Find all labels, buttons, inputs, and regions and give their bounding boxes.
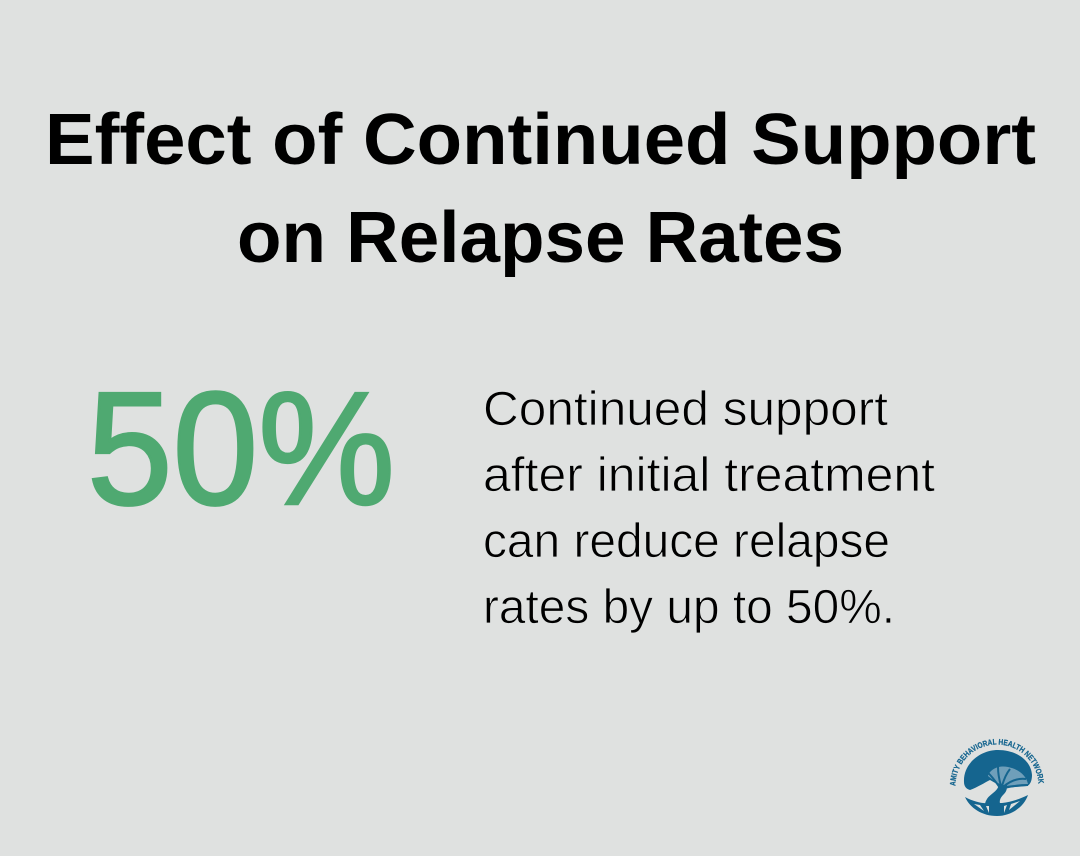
roots arc [965,795,1028,816]
description text: rates by up to 50%. [483,581,895,634]
title [45,100,1036,278]
description text: can reduce relapse [483,515,890,568]
title: Effect of Continued Support [45,100,1036,180]
description text [483,383,935,634]
title: on Relapse Rates [237,198,844,278]
statistic: 50%: 50% [87,359,395,539]
canopy highlights [988,766,1028,786]
description text: after initial treatment [483,449,935,502]
icon: Amity Behavioral Health Network logo [950,738,1044,816]
tree branches [987,767,1028,788]
icon: Amity Behavioral Health Network logo: AMITY BEHAVIORAL HEALTH NETWORK [950,738,1044,786]
description text: Continued support [483,383,888,436]
tree canopy [964,750,1032,790]
tree trunk [985,785,1007,807]
